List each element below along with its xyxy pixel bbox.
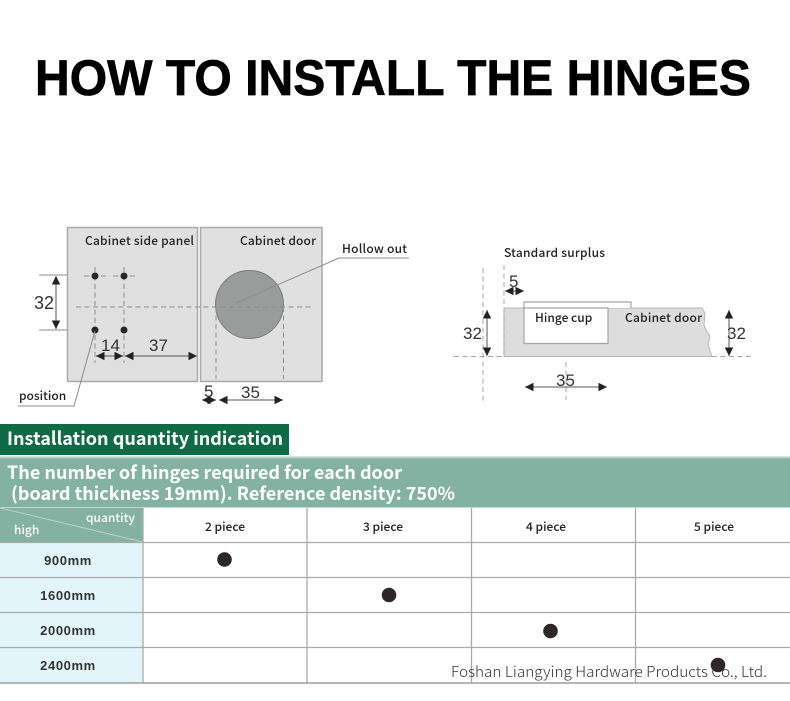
table banner: (board thickness 19mm). Reference density: 750%	[11, 480, 455, 506]
standard surplus label: Standard surplus	[504, 244, 605, 261]
hinge cup	[524, 302, 631, 344]
grid lines	[0, 508, 790, 683]
dashed guide lines	[76, 267, 311, 379]
table banner	[0, 456, 790, 508]
dimension 5: 5	[204, 382, 213, 401]
column headers: 2 piece	[205, 518, 245, 535]
dimension 5: 5	[509, 272, 518, 291]
table	[0, 508, 790, 683]
dimension 14: 14	[101, 336, 120, 355]
dashed guide lines	[454, 265, 754, 402]
row header cells: 2400mm	[40, 658, 96, 673]
diagram: door cross-section	[454, 244, 754, 402]
panel: cabinet side panel	[68, 228, 198, 382]
dimension 32 right	[727, 310, 746, 356]
dimension 35: 35	[556, 371, 575, 390]
column headers: 3 piece	[363, 518, 403, 535]
panel: cabinet side panel: Cabinet side panel	[85, 232, 194, 249]
title: HOW TO INSTALL THE HINGES	[35, 50, 751, 106]
table corner header: quantity	[86, 509, 135, 526]
dimension 35	[219, 383, 283, 402]
row header cells: 1600mm	[40, 588, 96, 603]
table corner header: high	[14, 521, 39, 538]
dimension 35	[525, 371, 607, 390]
dimension 37	[125, 336, 197, 356]
dimension 32 left: 32	[463, 324, 482, 343]
hollow out callout	[236, 240, 409, 303]
dimension 14	[96, 336, 123, 356]
dimension 32 right: 32	[727, 324, 746, 343]
dimension 5	[202, 382, 216, 401]
hollow out callout: Hollow out	[342, 240, 407, 257]
watermark: company name: Foshan Liangying Hardware Products Co., Ltd.	[451, 661, 767, 682]
table corner header	[0, 508, 143, 542]
row header cells: 900mm	[44, 553, 92, 568]
dimension 37: 37	[149, 336, 168, 355]
hinge cup: Hinge cup	[535, 309, 592, 326]
quantity markers	[217, 552, 725, 672]
dimension 32: 32	[34, 293, 54, 313]
diagram: hole positions front view	[18, 228, 409, 406]
panel: cabinet door	[200, 228, 322, 382]
dimension 5	[505, 272, 524, 291]
row header cells	[0, 543, 143, 683]
position callout	[18, 331, 95, 406]
hollow out circle	[216, 270, 284, 338]
column headers: 5 piece	[694, 518, 734, 535]
row header cells: 2000mm	[40, 623, 96, 638]
position callout: position	[19, 387, 66, 404]
heading: installation quantity indication: Installation quantity indication	[7, 425, 283, 451]
door profile	[504, 308, 712, 356]
column headers	[205, 518, 734, 535]
panel: cabinet door: Cabinet door	[240, 232, 316, 249]
dimension 32 left	[463, 310, 487, 356]
table banner: The number of hinges required for each door	[7, 459, 402, 485]
position holes	[92, 272, 128, 334]
cabinet door label: Cabinet door	[625, 309, 702, 326]
dimension 35: 35	[241, 383, 260, 402]
dimension 32	[34, 275, 67, 330]
column headers: 4 piece	[526, 518, 566, 535]
